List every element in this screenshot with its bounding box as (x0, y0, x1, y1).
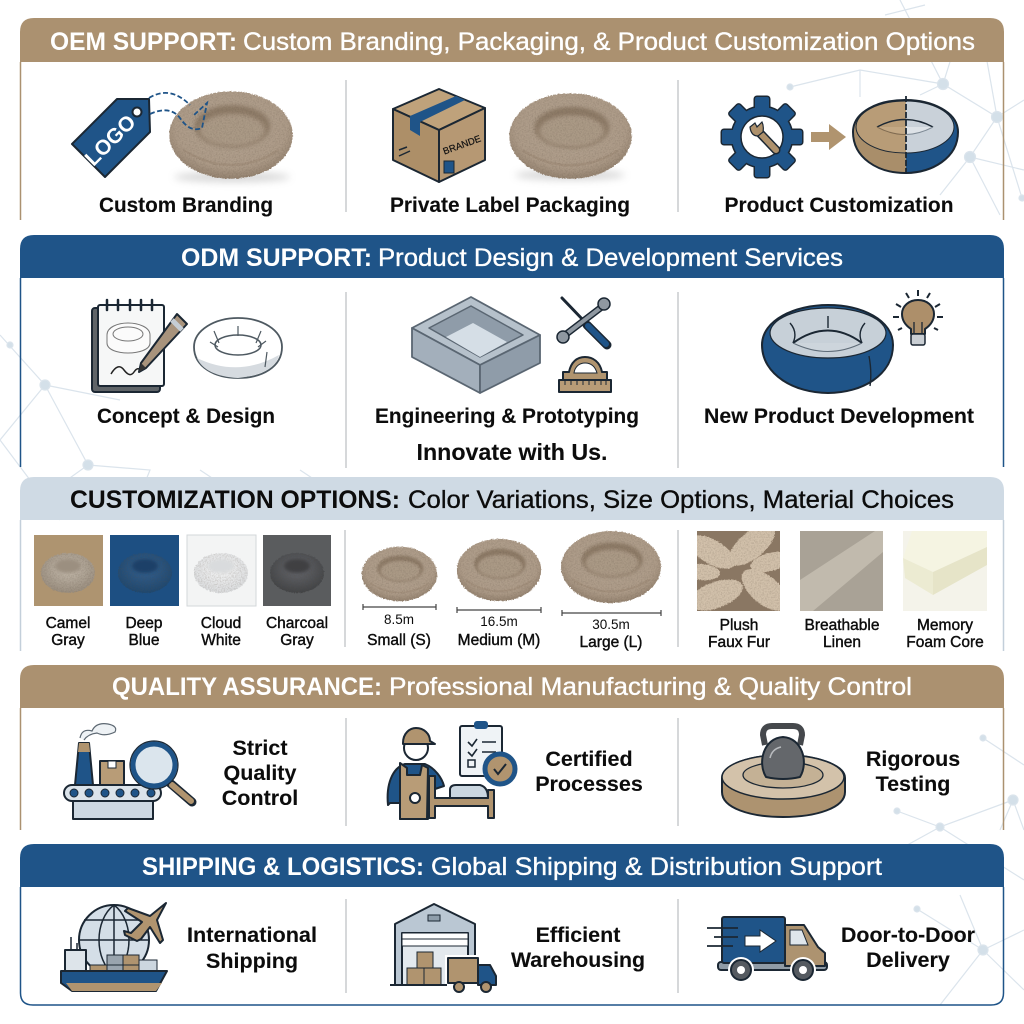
material: plush faux fur (697, 531, 780, 648)
ODM heading (20, 235, 1004, 278)
label: efficient warehousing: Warehousing (511, 948, 645, 972)
label: strict quality control: Control (222, 786, 298, 810)
customization heading: Color Variations, Size Options, Material Choices (408, 486, 954, 514)
label: rigorous testing: Rigorous (866, 747, 960, 771)
color swatch: camel gray (34, 535, 103, 649)
panel: ODM support (20, 235, 1004, 468)
material: plush faux fur: Plush (720, 617, 758, 634)
color swatch: camel gray: Gray (51, 632, 85, 649)
customization heading: CUSTOMIZATION OPTIONS: (70, 486, 400, 514)
icon: private label box and bed (393, 89, 632, 182)
label: engineering and prototyping: Engineering & Prototyping (375, 404, 639, 428)
icon: prototype tray, tools and protractor (412, 297, 611, 393)
material: memory foam core: Memory (917, 617, 973, 634)
icon: private label box and bed: BRANDE (442, 134, 483, 157)
icon: bed under kettlebell weight (722, 726, 845, 817)
icon: notepad, pencil and white bed (92, 300, 282, 392)
label: custom branding: Custom Branding (99, 193, 273, 217)
color swatch: deep blue (110, 535, 179, 649)
color swatch: charcoal gray: Gray (280, 632, 314, 649)
size: large bed: 30.5m (592, 617, 630, 632)
icon: new blue bed with light bulb (762, 290, 943, 393)
label: efficient warehousing: Efficient (536, 923, 620, 947)
label: strict quality control: Quality (224, 761, 296, 785)
size: small bed: 8.5m (384, 612, 414, 627)
label: door-to-door delivery: Delivery (866, 948, 950, 972)
color swatch: deep blue: Deep (125, 615, 163, 632)
label: door-to-door delivery: Door-to-Door (841, 923, 976, 947)
icon: logo tag and camel bed: LOGO (81, 111, 141, 171)
icon: warehouse with truck (390, 904, 496, 992)
color swatch: deep blue: Blue (128, 632, 160, 649)
icon: product customization gear and split bed (722, 96, 958, 177)
panel: customization options (20, 477, 1004, 651)
panel: quality assurance (20, 665, 1004, 830)
ODM heading: Product Design & Development Services (378, 244, 843, 272)
label: rigorous testing (866, 747, 960, 796)
label: rigorous testing: Testing (876, 772, 950, 796)
color swatch: cloud white: Cloud (201, 615, 241, 632)
label: certified processes: Processes (535, 772, 643, 796)
material: breathable linen (800, 531, 883, 651)
panel: OEM support (20, 18, 1004, 220)
label: international shipping (187, 923, 317, 973)
quality assurance heading: QUALITY ASSURANCE: (112, 673, 382, 701)
label: certified processes (535, 747, 643, 796)
label: international shipping: Shipping (206, 949, 298, 973)
material: memory foam core: Foam Core (906, 634, 984, 651)
size: large bed (561, 531, 661, 651)
color swatch: charcoal gray (263, 535, 331, 649)
size: medium bed: 16.5m (480, 614, 518, 629)
label: strict quality control: Strict (233, 736, 287, 760)
material: memory foam core (903, 531, 987, 651)
label: new product development: New Product Development (704, 404, 974, 428)
icon: logo tag and camel bed (72, 91, 293, 182)
OEM heading: OEM SUPPORT: (50, 28, 237, 56)
color swatch: cloud white (187, 535, 256, 649)
label: international shipping: International (187, 923, 317, 947)
label: certified processes: Certified (545, 747, 633, 771)
icon: door-to-door delivery truck (707, 917, 827, 983)
icon: worker with checklist (388, 721, 515, 819)
size: medium bed: Medium (M) (458, 632, 540, 649)
shipping heading (20, 844, 1004, 887)
quality assurance heading (20, 665, 1004, 708)
label: product customization: Product Customization (724, 193, 954, 217)
material: breathable linen: Linen (823, 634, 861, 651)
OEM heading: Custom Branding, Packaging, & Product Customization Options (243, 28, 975, 56)
size: small bed: Small (S) (367, 632, 431, 649)
icon: globe, plane and cargo ship (61, 903, 167, 991)
label: strict quality control (222, 736, 298, 810)
callout: innovate with us: Innovate with Us. (416, 439, 608, 465)
label: efficient warehousing (511, 923, 645, 972)
quality assurance heading: Professional Manufacturing & Quality Control (389, 673, 912, 701)
material: plush faux fur: Faux Fur (708, 634, 770, 651)
panel: shipping and logistics (20, 844, 1004, 1005)
size: medium bed (457, 539, 541, 649)
ODM heading: ODM SUPPORT: (181, 244, 372, 272)
label: private label packaging: Private Label Packaging (390, 193, 630, 217)
label: door-to-door delivery (841, 923, 976, 972)
shipping heading: Global Shipping & Distribution Support (431, 853, 882, 881)
shipping heading: SHIPPING & LOGISTICS: (142, 853, 424, 881)
color swatch: camel gray: Camel (46, 615, 90, 632)
OEM heading (20, 18, 1004, 62)
size: large bed: Large (L) (580, 634, 642, 651)
color swatch: cloud white: White (201, 632, 241, 649)
customization heading (20, 477, 1004, 520)
color swatch: charcoal gray: Charcoal (266, 615, 328, 632)
material: breathable linen: Breathable (805, 617, 879, 634)
icon: factory and magnifier (64, 724, 192, 819)
size: small bed (362, 547, 437, 649)
label: concept and design: Concept & Design (97, 404, 275, 428)
